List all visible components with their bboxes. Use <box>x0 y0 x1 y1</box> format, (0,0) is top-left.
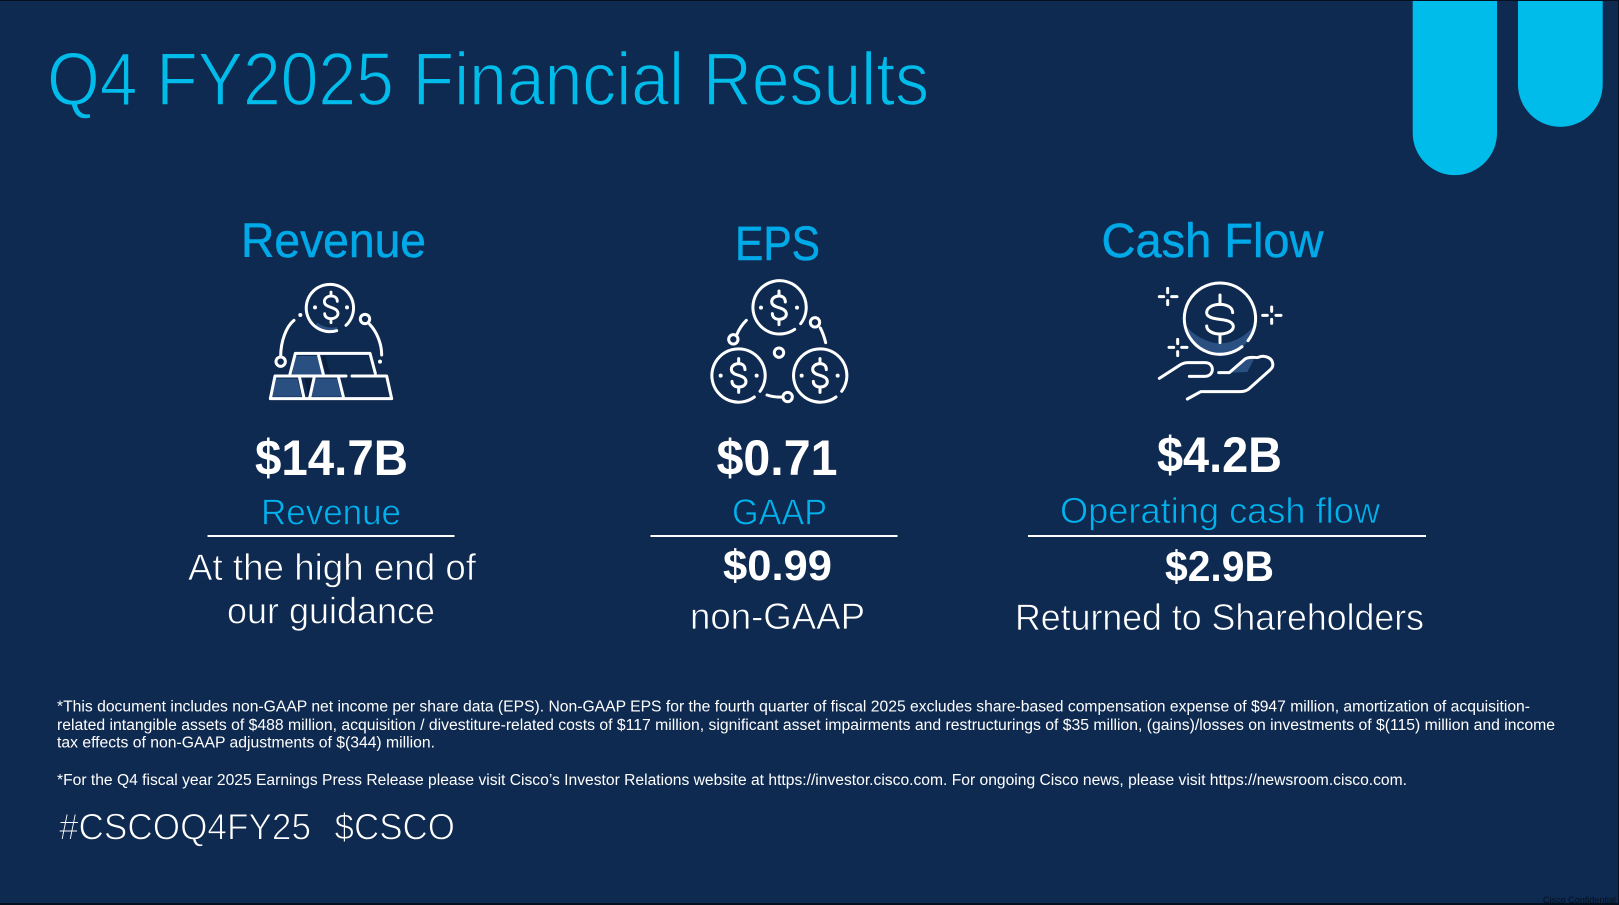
label: returned to shareholders: Returned to Shareholders <box>1015 597 1424 638</box>
heading: revenue: Revenue <box>241 215 426 268</box>
confidentiality mark: Cisco Confidential <box>1543 895 1616 905</box>
hashtags: $CSCO <box>334 806 455 848</box>
footnotes: *This document includes non-GAAP net income per share data (EPS). Non-GAAP EPS for the fourth quarter of fiscal 2025 excludes share-based compensation expense of $947 million, amortization of acquisition- <box>57 698 1530 716</box>
heading: EPS: EPS <box>735 218 820 271</box>
label: revenue: Revenue <box>261 492 401 532</box>
panel: cash flow <box>1015 215 1426 638</box>
note: guidance <box>188 547 477 632</box>
label: non-GAAP: non-GAAP <box>690 596 865 637</box>
panel: EPS <box>650 218 898 637</box>
title: Q4 FY2025 Financial Results <box>47 37 929 121</box>
icon: hand holding coin <box>1159 283 1281 399</box>
hashtags <box>59 806 455 848</box>
footnotes <box>57 698 1555 789</box>
decorative pills: top right brand shapes <box>1413 1 1603 175</box>
footnotes: related intangible assets of $488 million, acquisition / divestiture-related costs of $117 million, significant asset impairments and restructurings of $35 million, (gains)/losses on investments of $(115) million and income <box>57 717 1555 734</box>
footnotes: tax effects of non-GAAP adjustments of $(344) million. <box>57 734 435 752</box>
icon: three coins <box>712 281 847 402</box>
label: operating cash flow: Operating cash flow <box>1060 490 1381 531</box>
value: non-GAAP EPS: $0.99 <box>723 542 832 590</box>
icon: gold bars with coin <box>270 284 392 399</box>
hashtags: #CSCOQ4FY25 <box>59 806 311 848</box>
footnotes: *For the Q4 fiscal year 2025 Earnings Press Release please visit Cisco’s Investor Relations website at https://investor.cisco.com. For ongoing Cisco news, please visit https://newsroom.cisco.com. <box>57 772 1407 789</box>
note: guidance: our guidance <box>227 590 435 632</box>
note: guidance: At the high end of <box>188 547 477 588</box>
value: revenue: $14.7B <box>255 430 408 486</box>
heading: cash flow: Cash Flow <box>1102 215 1324 268</box>
panel: revenue <box>188 215 477 632</box>
value: GAAP EPS: $0.71 <box>716 430 838 486</box>
label: GAAP: GAAP <box>732 492 827 532</box>
value: returned to shareholders: $2.9B <box>1165 543 1274 591</box>
value: operating cash flow: $4.2B <box>1157 427 1282 483</box>
